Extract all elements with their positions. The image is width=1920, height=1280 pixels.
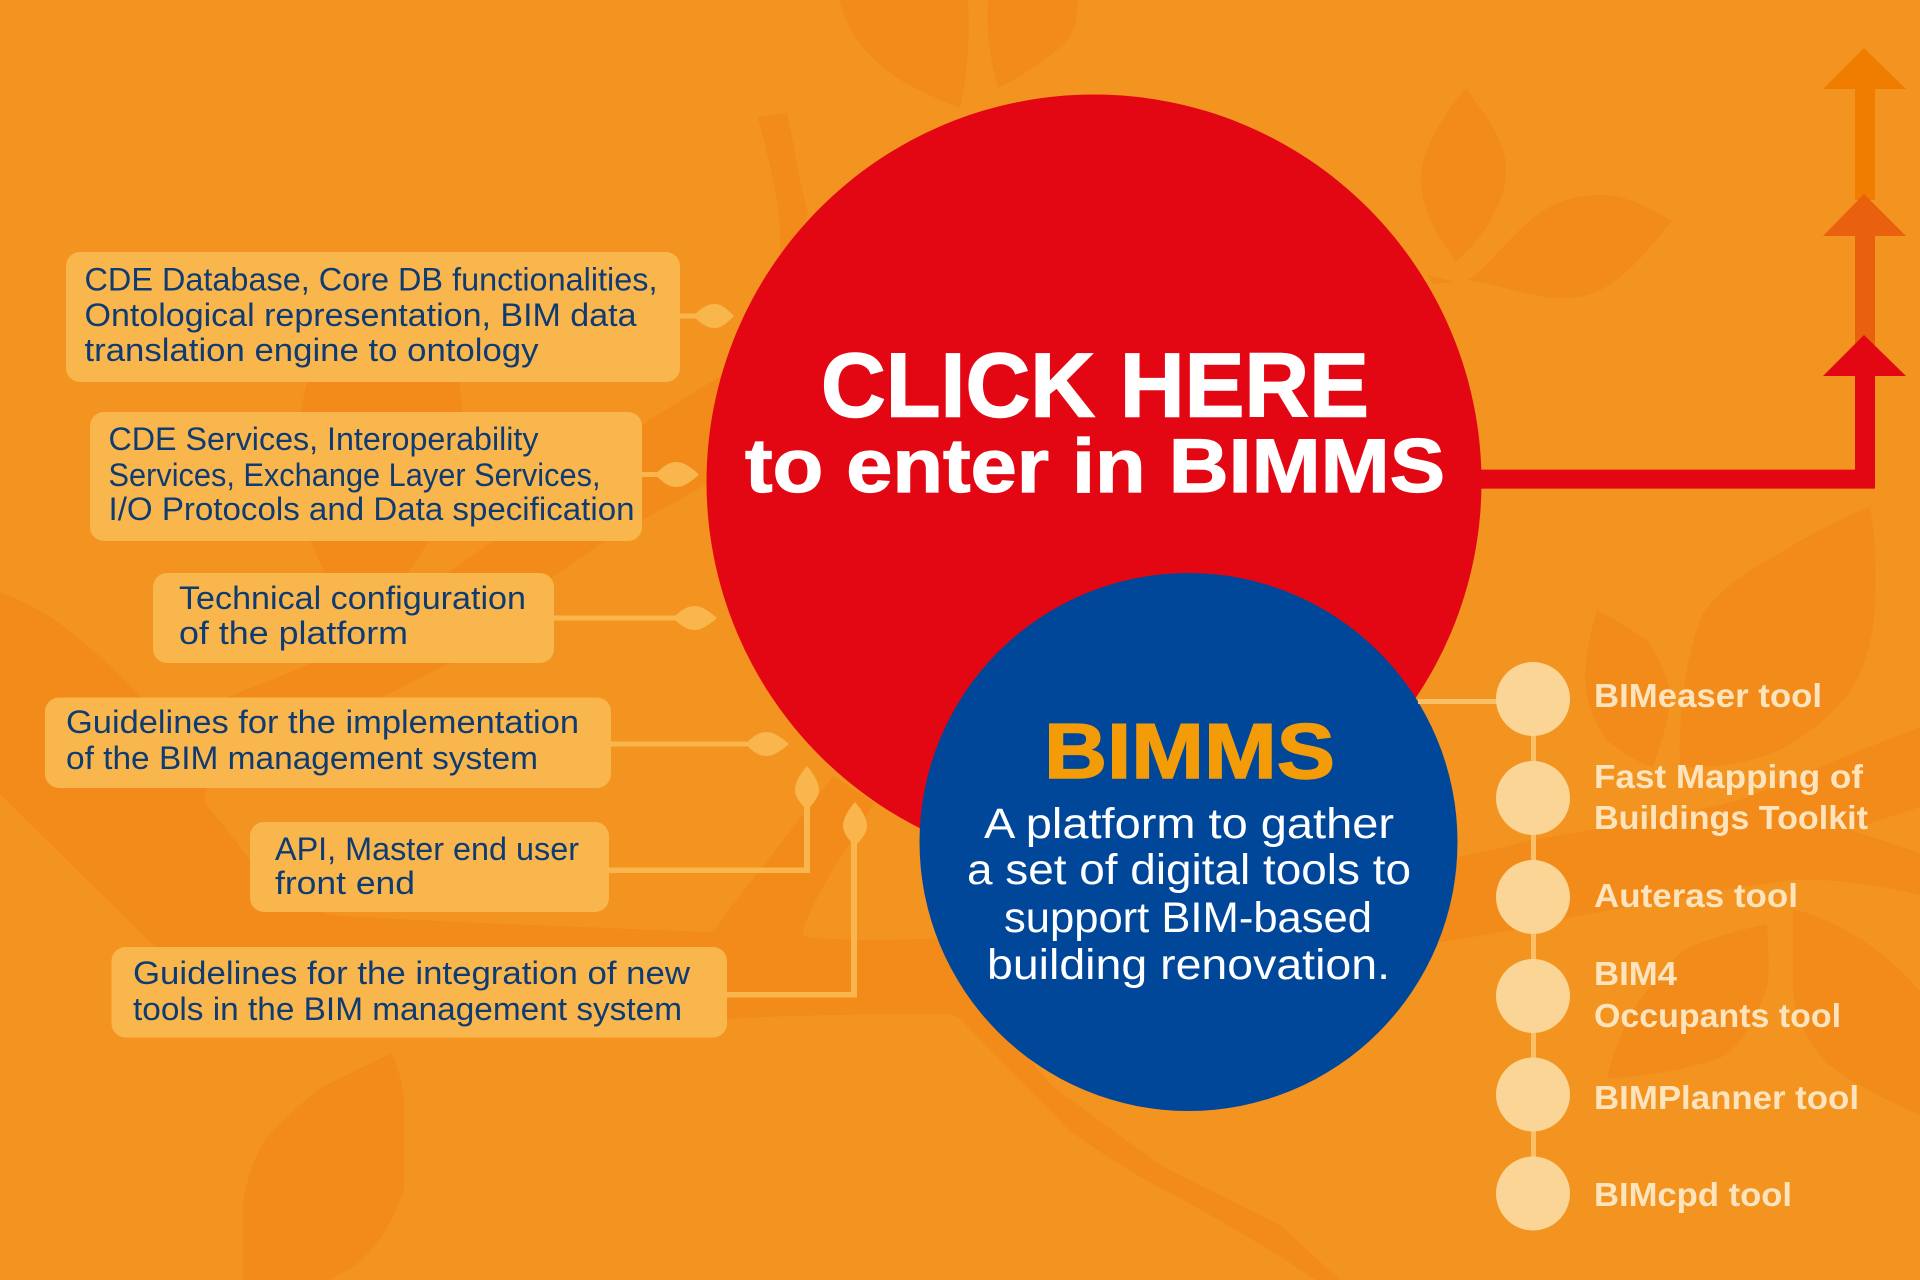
panel: CDE database: CDE Database, Core DB functionalities, (84, 262, 658, 298)
panel: API: API, Master end user (275, 831, 579, 867)
description text: support BIM-based (1004, 894, 1372, 942)
tool: Fast Mapping: Fast Mapping of (1594, 758, 1864, 795)
panel: technical configuration: Technical configuration (179, 580, 526, 616)
panel: API (250, 822, 609, 912)
connector: box 2 (642, 462, 699, 487)
description text: building renovation. (987, 941, 1390, 989)
panel: CDE database: Ontological representation, BIM data (84, 297, 637, 333)
arrow: red connector with three stacked arrowheads (1480, 48, 1906, 489)
blue circle: BIMMS description (920, 573, 1458, 1111)
connector: box 3 (553, 606, 717, 630)
panel: CDE services: CDE Services, Interoperability (108, 421, 538, 457)
heading: click here: CLICK HERE (821, 336, 1369, 436)
panel: CDE services: I/O Protocols and Data specification (108, 491, 634, 527)
tool: Fast Mapping: Buildings Toolkit (1594, 799, 1868, 836)
tool: BIM4 Occupants: BIM4 (1594, 955, 1678, 992)
panel: implementation guidelines: of the BIM management system (66, 740, 538, 776)
panel: integration guidelines (112, 947, 727, 1038)
panel: API: front end (275, 865, 415, 901)
tool: BIMPlanner (1496, 1058, 1859, 1132)
description text: a set of digital tools to (967, 846, 1411, 894)
panel: technical configuration: of the platform (179, 615, 408, 651)
heading: BIMMS: BIMMS (1044, 707, 1335, 795)
connector: box 4 (611, 732, 789, 756)
tool: BIMPlanner: BIMPlanner tool (1594, 1079, 1859, 1116)
tool: BIM4 Occupants: Occupants tool (1594, 997, 1841, 1034)
tool: Fast Mapping (1496, 758, 1868, 836)
connector: box 6 (727, 802, 867, 998)
tool: Auteras: Auteras tool (1594, 877, 1798, 914)
tool: BIMcpd: BIMcpd tool (1594, 1176, 1792, 1213)
tools timeline (1418, 662, 1868, 1230)
panel: CDE services (90, 412, 642, 541)
connector: box 5 (609, 766, 819, 873)
panel: integration guidelines: tools in the BIM management system (133, 991, 682, 1027)
panel: CDE database: translation engine to ontology (84, 332, 538, 368)
description text: A platform to gather (984, 800, 1394, 848)
tool: BIM4 Occupants (1496, 955, 1841, 1034)
panel: implementation guidelines (45, 698, 611, 788)
panel: technical configuration (153, 573, 554, 663)
panel: integration guidelines: Guidelines for the integration of new (133, 955, 691, 991)
red circle: click here (706, 94, 1482, 870)
tool: BIMcpd (1496, 1156, 1792, 1230)
tool: BIMeaser: BIMeaser tool (1594, 677, 1822, 714)
heading: to enter in BIMMS: to enter in BIMMS (745, 424, 1445, 509)
tool: Auteras (1496, 860, 1798, 934)
connector: box 1 (680, 304, 734, 328)
panel: CDE services: Services, Exchange Layer Services, (108, 457, 600, 493)
tool: BIMeaser (1496, 662, 1822, 736)
panel: CDE database (66, 252, 680, 382)
panel: implementation guidelines: Guidelines for the implementation (66, 704, 579, 740)
description text (967, 800, 1411, 989)
